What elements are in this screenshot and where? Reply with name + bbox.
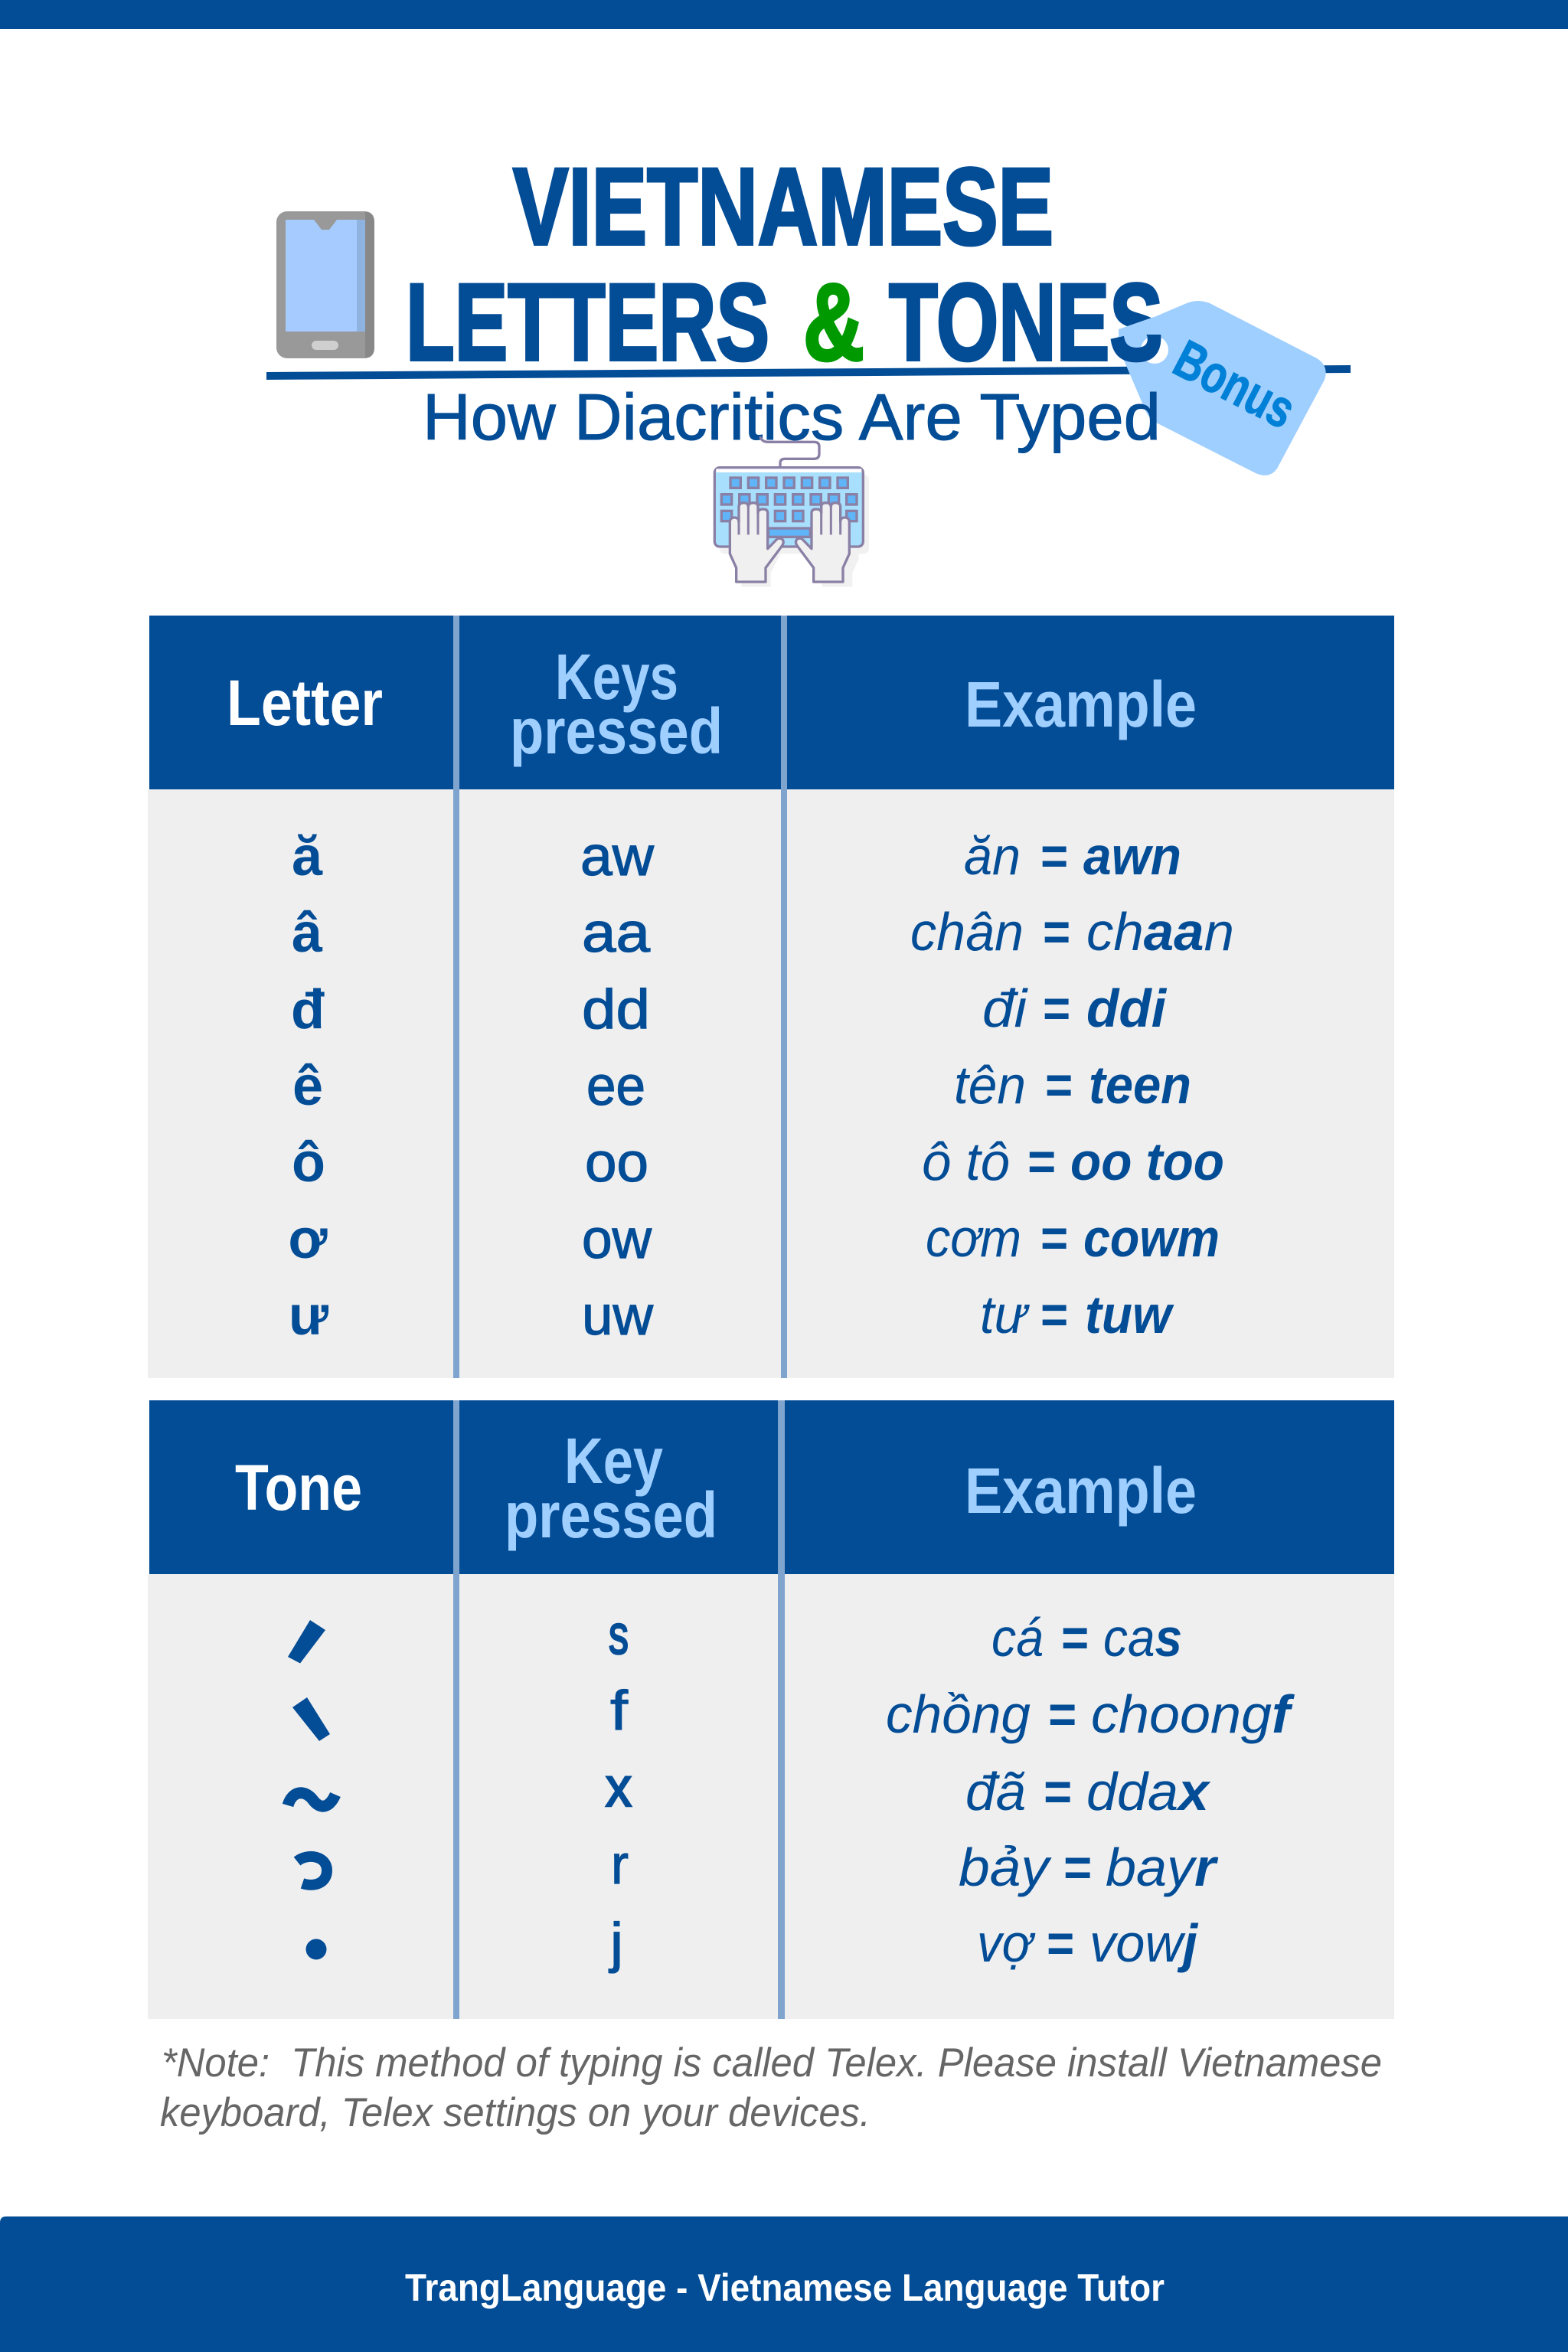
heading: Keys pressed: [510, 641, 723, 767]
tone examples column: =: [1047, 1684, 1076, 1744]
tone examples column: ddax: [1086, 1762, 1211, 1821]
title: [406, 146, 1163, 384]
subtitle: How Diacritics Are Typed: [423, 381, 1161, 454]
examples column: chân: [910, 902, 1024, 962]
examples column: cơm: [926, 1208, 1021, 1268]
tone examples column: choongf: [1091, 1684, 1295, 1744]
tone examples column: [886, 1608, 1295, 1973]
column divider 2: [781, 616, 787, 1378]
title: LETTERS: [406, 262, 769, 384]
keys pressed column: [580, 826, 655, 1347]
examples column: oo too: [1070, 1132, 1224, 1191]
icon: bonus tag: [1117, 301, 1326, 475]
letters column: â: [292, 903, 323, 964]
note text: *Note: This method of typing is called Telex. Please install Vietnamese: [162, 2040, 1382, 2086]
heading: Example: Example: [965, 668, 1197, 740]
examples column: =: [1042, 902, 1070, 962]
heading: Tone: Tone: [235, 1452, 362, 1524]
key pressed column: x: [606, 1757, 632, 1818]
key pressed column: [606, 1605, 632, 1974]
letters column: đ: [291, 979, 325, 1040]
bonus label: Bonus: [1165, 328, 1305, 440]
icon: acute mark: [288, 1620, 325, 1663]
panel: letters table: [148, 616, 1394, 1378]
tone examples column: cas: [1103, 1608, 1182, 1668]
tone examples column: bảy: [959, 1838, 1052, 1897]
column divider 1: [453, 616, 459, 1378]
tones table header band: [149, 1400, 1394, 1574]
tone examples column: chồng: [886, 1684, 1031, 1744]
examples column: tư: [980, 1285, 1030, 1344]
keys pressed column: aw: [580, 826, 655, 887]
heading: Key pressed: Key: [564, 1425, 663, 1497]
letters table background: [148, 789, 1394, 1378]
icon: dot mark: [306, 1939, 326, 1960]
key pressed column: s: [609, 1605, 629, 1666]
tag overlap over title letter: [1119, 317, 1165, 335]
letters column: ă: [292, 826, 323, 887]
note text: [160, 2040, 1382, 2135]
key pressed column: r: [611, 1834, 629, 1896]
footer bar: [0, 2216, 1568, 2352]
footer text: TrangLanguage - Vietnamese Language Tutor: [405, 2266, 1165, 2309]
examples column: =: [1042, 978, 1070, 1038]
examples column: =: [1040, 826, 1067, 886]
tone examples column: =: [1060, 1608, 1088, 1668]
title underline: [266, 365, 1351, 380]
tone examples column: vowj: [1089, 1913, 1199, 1973]
panel: tones table: [148, 1400, 1394, 2019]
tone examples column: bayr: [1106, 1838, 1219, 1897]
icon: tilde mark: [288, 1793, 335, 1806]
keys pressed column: oo: [585, 1132, 648, 1194]
examples column: teen: [1089, 1055, 1191, 1115]
heading: Letter: Letter: [227, 667, 383, 739]
examples column: [910, 826, 1234, 1344]
examples column: ddi: [1086, 978, 1168, 1038]
icon: hook mark: [297, 1857, 327, 1885]
letters column: [288, 826, 329, 1347]
examples column: =: [1044, 1055, 1072, 1115]
tones column divider 1: [453, 1400, 459, 2019]
icon: hands on keyboard: [714, 436, 869, 587]
letters table header band: [149, 616, 1394, 789]
examples column: ăn: [964, 826, 1021, 886]
examples column: =: [1040, 1208, 1067, 1268]
examples column: tuw: [1085, 1285, 1174, 1344]
examples column: tên: [954, 1055, 1026, 1115]
examples column: đi: [982, 978, 1029, 1038]
tone examples column: đã: [965, 1762, 1026, 1821]
keys pressed column: dd: [582, 979, 650, 1040]
title: TONES: [889, 262, 1163, 384]
examples column: =: [1027, 1132, 1055, 1191]
top bar: [0, 0, 1568, 29]
heading: Key pressed: [505, 1425, 717, 1551]
keys pressed column: aa: [582, 903, 651, 964]
tone examples column: cá: [991, 1608, 1044, 1668]
keys pressed column: ow: [582, 1209, 652, 1270]
icon: phone: [276, 211, 374, 358]
examples column: awn: [1083, 826, 1181, 886]
letters column: ư: [289, 1285, 329, 1347]
tone marks column: [288, 1620, 335, 1960]
keys pressed column: ee: [586, 1056, 645, 1117]
letters column: ê: [292, 1056, 323, 1117]
tone examples column: =: [1063, 1838, 1091, 1897]
tones table background: [148, 1574, 1394, 2019]
heading: Keys pressed: Keys: [555, 641, 678, 713]
heading: Key pressed: pressed: [505, 1479, 717, 1551]
title: VIETNAMESE: [513, 146, 1054, 268]
tone examples column: =: [1046, 1913, 1073, 1973]
title: &: [803, 262, 864, 384]
key pressed column: j: [609, 1913, 623, 1974]
examples column: =: [1040, 1285, 1067, 1344]
examples column: chaan: [1086, 902, 1234, 962]
heading: Keys pressed: pressed: [510, 695, 723, 767]
examples column: cowm: [1083, 1208, 1220, 1268]
tones column divider 2: [778, 1400, 785, 2019]
examples column: ô tô: [922, 1132, 1010, 1191]
keys pressed column: uw: [582, 1285, 654, 1347]
tone examples column: =: [1043, 1762, 1071, 1821]
letters column: ô: [292, 1132, 325, 1194]
icon: grave mark: [292, 1697, 330, 1741]
heading: Example: Example: [965, 1455, 1197, 1527]
key pressed column: f: [610, 1681, 629, 1742]
note text: keyboard, Telex settings on your devices.: [160, 2090, 871, 2135]
letters column: ơ: [288, 1209, 328, 1270]
tone examples column: vợ: [977, 1913, 1036, 1973]
